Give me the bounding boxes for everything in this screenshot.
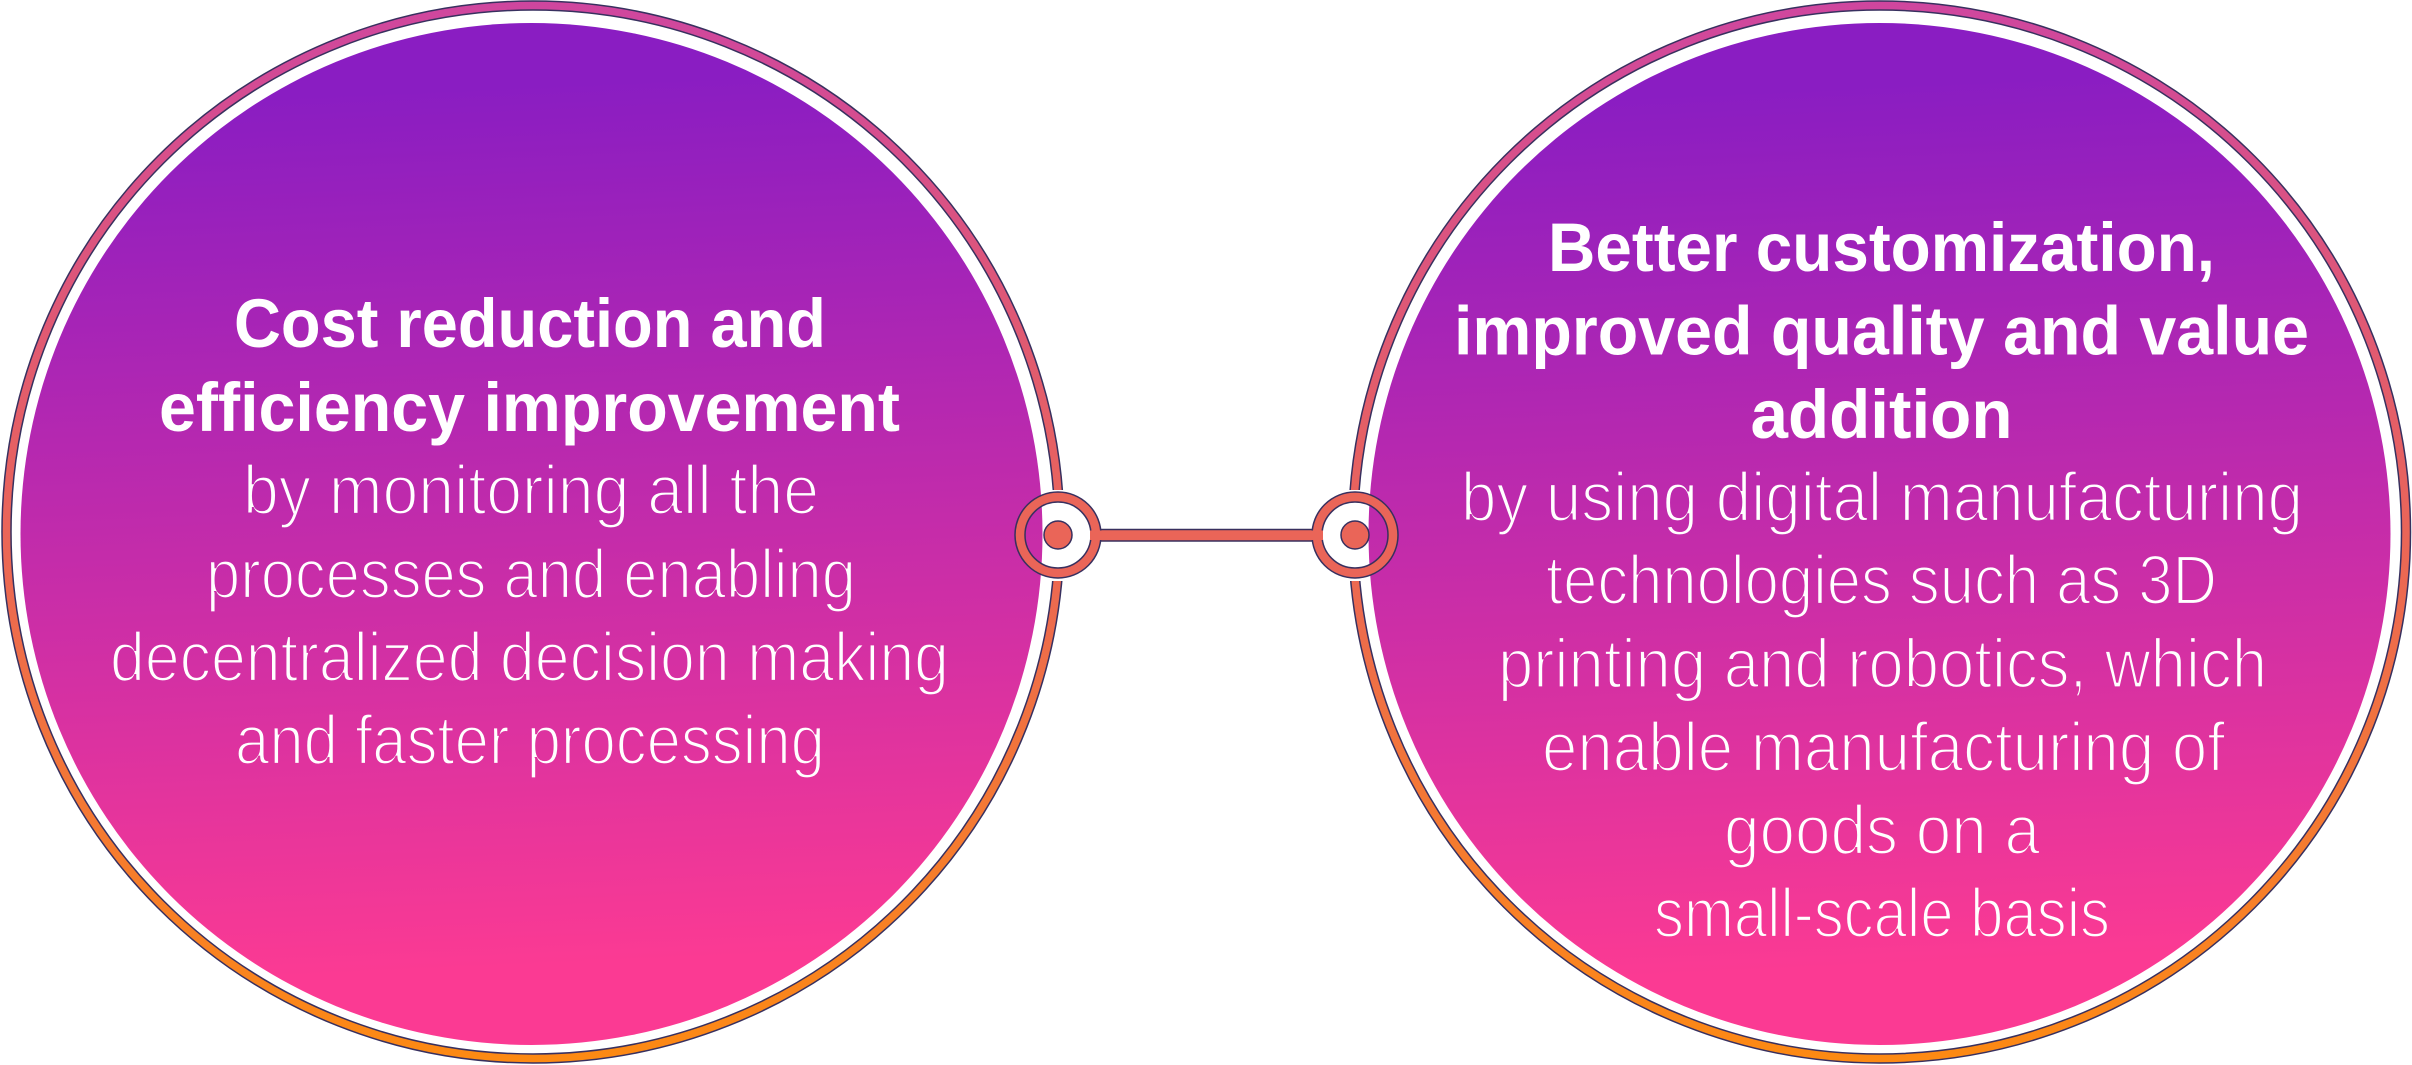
- right body text: small-scale basis: [1654, 874, 2110, 952]
- left body text: processes and enabling: [206, 535, 856, 613]
- left heading: [159, 285, 900, 446]
- connector bar: [1094, 530, 1319, 541]
- left outer ring: [6, 6, 1060, 1058]
- left body text: by monitoring all the: [243, 451, 819, 529]
- right heading: Better customization,: [1548, 209, 2215, 286]
- left body text: [110, 451, 949, 779]
- left body text: decentralized decision making: [110, 618, 949, 696]
- right outer ring: [1353, 6, 2406, 1058]
- right body text: technologies such as 3D: [1546, 541, 2217, 619]
- left body text: and faster processing: [235, 701, 825, 779]
- connector between circles: [1020, 497, 1393, 573]
- panel: right circle: [1353, 6, 2406, 1058]
- right gradient disc: [1368, 23, 2390, 1045]
- right body text: enable manufacturing of: [1542, 708, 2225, 786]
- right body text: goods on a: [1724, 791, 2040, 869]
- right heading: improved quality and value: [1454, 292, 2309, 370]
- right body text: [1461, 458, 2303, 952]
- right body text: by using digital manufacturing: [1461, 458, 2303, 536]
- left heading: Cost reduction and: [234, 285, 826, 362]
- right heading: addition: [1750, 376, 2012, 453]
- left connector node: [1020, 497, 1096, 573]
- right connector node: [1317, 497, 1393, 573]
- right heading: [1454, 209, 2309, 453]
- right body text: printing and robotics, which: [1498, 624, 2267, 702]
- left gradient disc: [20, 23, 1042, 1045]
- left heading: efficiency improvement: [159, 369, 900, 446]
- panel: left circle: [6, 6, 1060, 1058]
